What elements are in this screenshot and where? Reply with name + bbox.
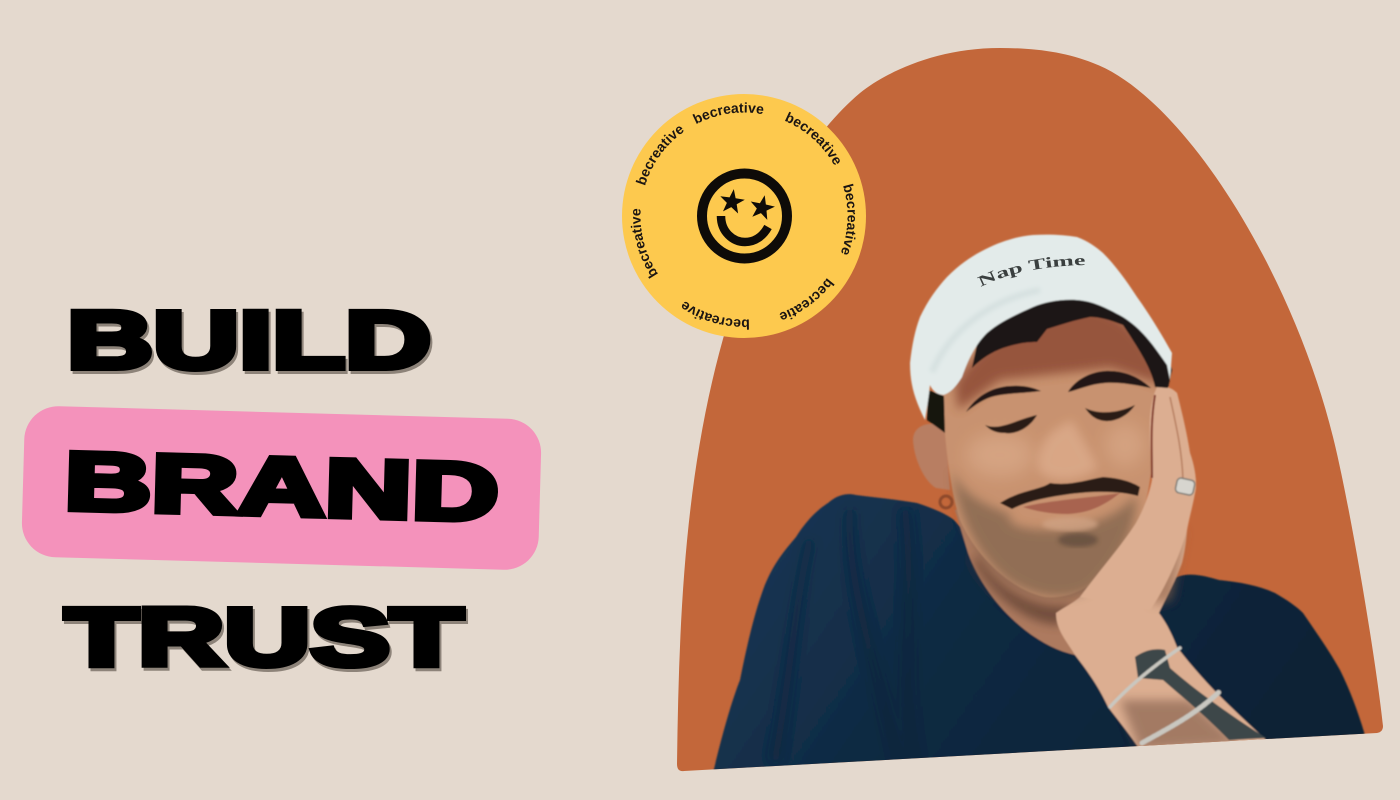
lips bbox=[1023, 493, 1120, 514]
cap bbox=[910, 235, 1172, 420]
stubble beard bbox=[952, 470, 1136, 597]
circular text: becreative bbox=[785, 112, 840, 165]
photo: smiling man in cap bbox=[712, 234, 1366, 770]
heading word: TRUST: TRUST bbox=[67, 595, 465, 686]
shirt bbox=[712, 493, 1366, 770]
circular text: becreative bbox=[636, 126, 684, 186]
hand over cheek bbox=[1080, 386, 1196, 610]
face bbox=[943, 300, 1162, 597]
cheek light bbox=[966, 433, 1034, 477]
ring bbox=[1175, 477, 1195, 496]
forehead shadow bbox=[955, 305, 1162, 410]
ear bbox=[913, 424, 950, 490]
tattoo bbox=[1135, 649, 1266, 740]
badge disc bbox=[622, 94, 866, 338]
circular text: becreative bbox=[692, 102, 764, 124]
forearm and hand bbox=[1055, 498, 1267, 746]
orange arch panel bbox=[677, 48, 1383, 771]
circular text bbox=[630, 102, 856, 330]
shirt folds bbox=[775, 510, 915, 770]
hair bbox=[927, 390, 945, 433]
circular text: becreative bbox=[630, 208, 658, 279]
pink highlight pill bbox=[21, 405, 542, 571]
circular text: becreatie bbox=[780, 278, 835, 320]
bracelets bbox=[1110, 648, 1219, 743]
neck bbox=[954, 510, 1087, 656]
heading word: BUILD bbox=[67, 295, 433, 389]
moustache bbox=[1000, 477, 1140, 509]
heading word: BRAND: BRAND bbox=[64, 436, 500, 539]
heading word: TRUST: TRUST bbox=[65, 592, 463, 683]
light patch under lip bbox=[1042, 517, 1098, 531]
heading word: BUILD: BUILD bbox=[69, 298, 433, 389]
goatee bbox=[1058, 533, 1098, 547]
chin shadow on neck bbox=[975, 550, 1075, 625]
heading word: BUILD: BUILD bbox=[67, 295, 431, 386]
badge: becreative sticker bbox=[622, 94, 866, 338]
circular text: becreative bbox=[841, 184, 856, 254]
finger lines bbox=[1152, 395, 1183, 480]
cap text: Nap Time: Nap Time bbox=[977, 257, 1085, 287]
heading: Build Brand Trust bbox=[21, 295, 542, 686]
closed eyes bbox=[985, 405, 1135, 433]
circular text: becreative bbox=[682, 302, 749, 330]
cap brim shading bbox=[932, 290, 1040, 372]
nose highlight bbox=[1038, 420, 1098, 480]
heading word: TRUST bbox=[65, 592, 465, 686]
earring bbox=[940, 496, 952, 508]
right cheek light bbox=[1107, 426, 1143, 464]
icon: star-eyed smiley bbox=[702, 174, 787, 258]
arm hair shading bbox=[1154, 536, 1187, 612]
eyebrows bbox=[966, 371, 1151, 412]
